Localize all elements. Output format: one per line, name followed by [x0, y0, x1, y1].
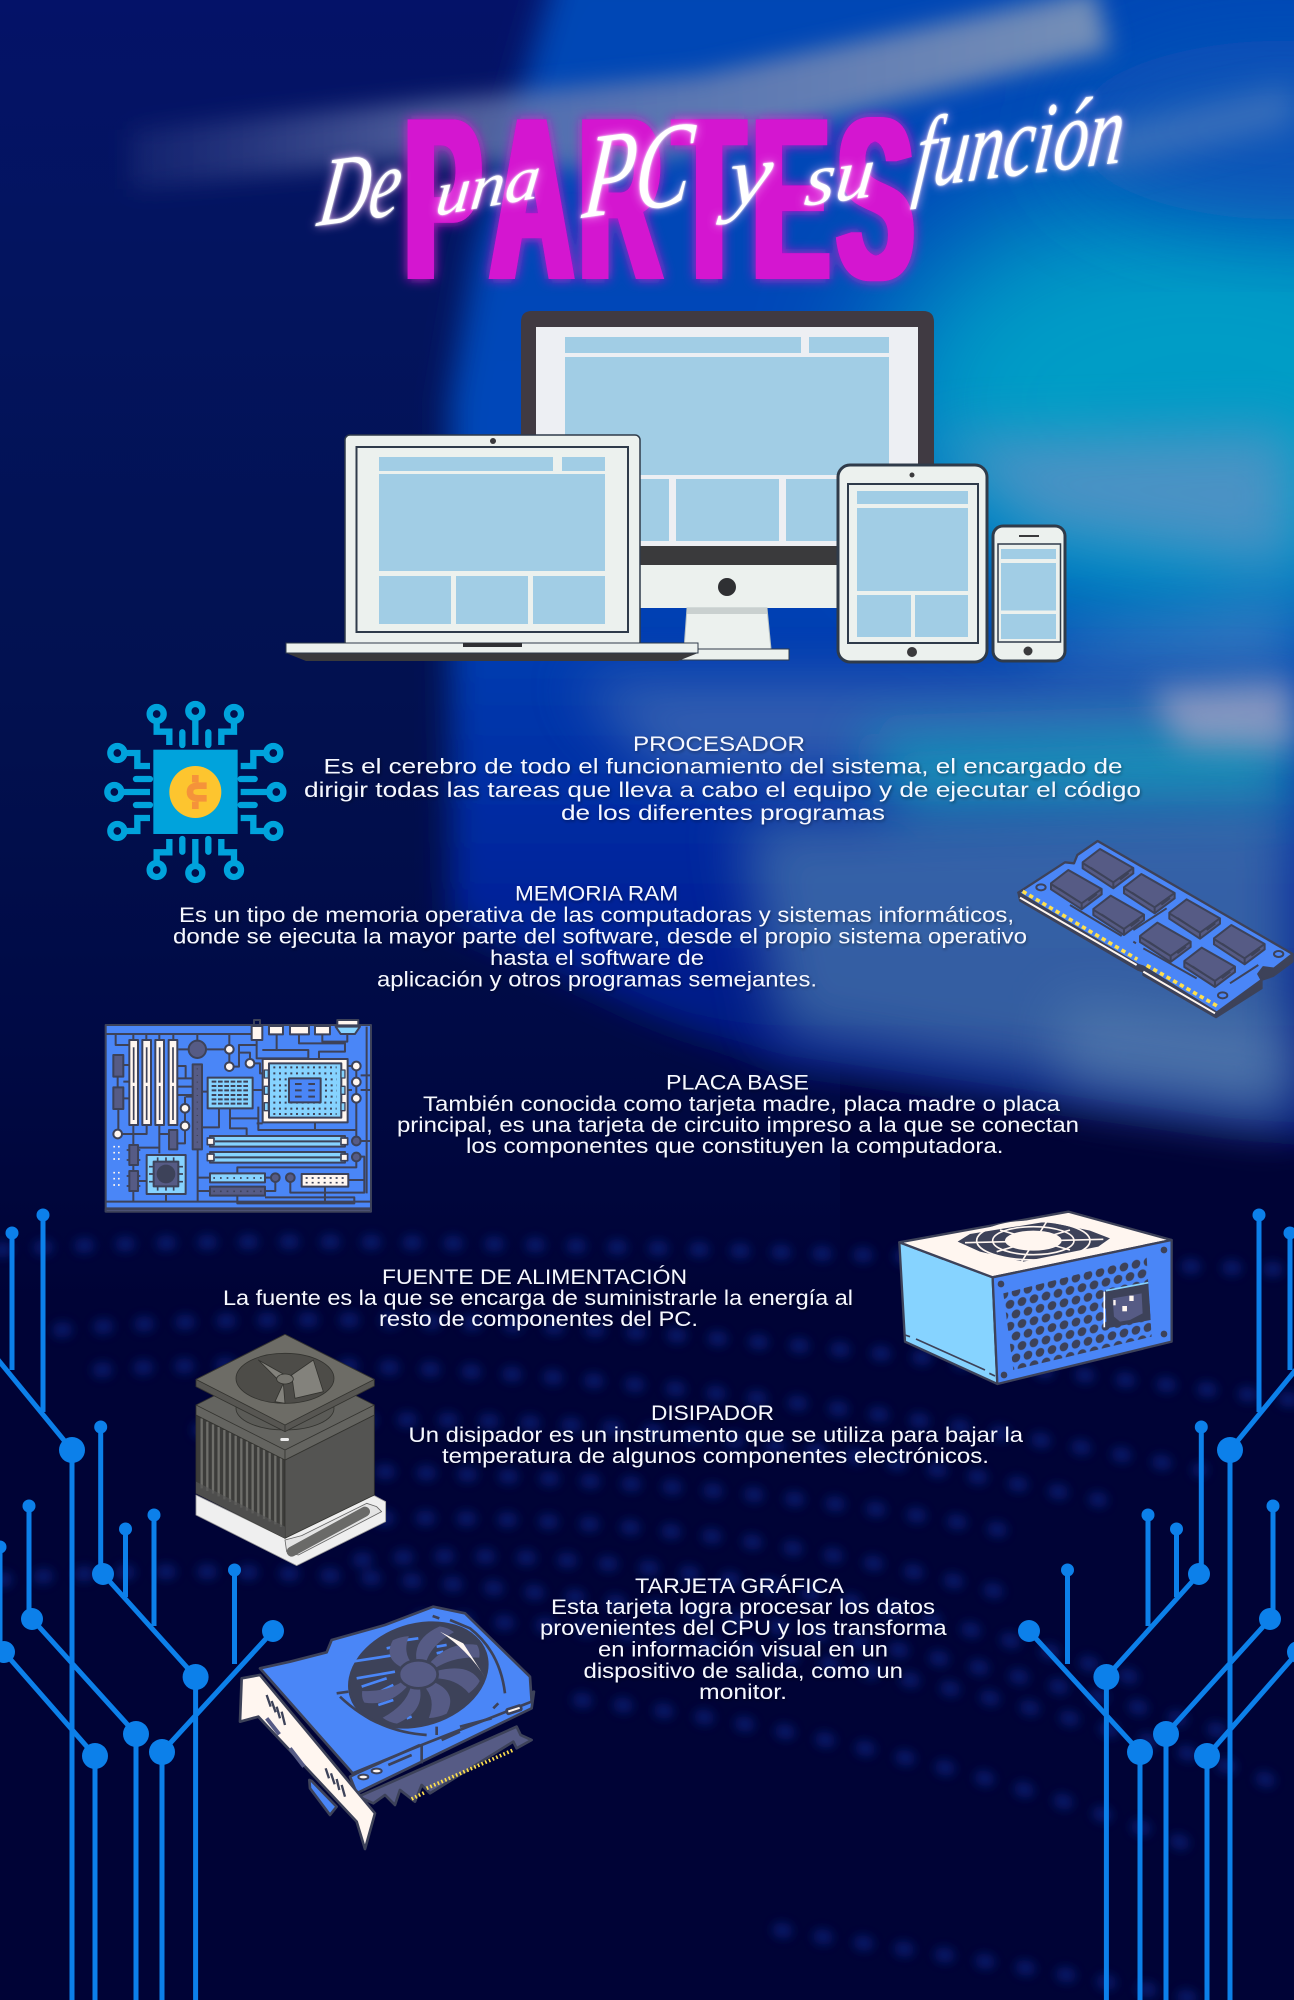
subtitle script: su [801, 131, 879, 223]
icon: RAM module [1018, 841, 1293, 1017]
text: memoria RAM: aplicación y otros programas semejantes. [377, 967, 817, 991]
text: tarjeta gráfica: dispositivo de salida, como un [584, 1659, 903, 1683]
text: procesador [304, 732, 1141, 825]
text: procesador: de los diferentes programas [561, 801, 885, 825]
circuit lines: right [1018, 1208, 1294, 2000]
icon: power supply [899, 1212, 1172, 1384]
devices illustration [286, 311, 1065, 662]
text: placa base [397, 1071, 1079, 1158]
icon: processor [107, 704, 283, 880]
text: disipador: temperatura de algunos componentes electrónicos. [442, 1444, 989, 1468]
circuit lines: left [0, 1208, 284, 2000]
subtitle script: y [715, 126, 778, 227]
icon: motherboard [106, 1020, 371, 1212]
monitor [521, 311, 934, 660]
text: disipador [408, 1401, 1023, 1468]
subtitle script: una [432, 141, 544, 231]
subtitle script [312, 73, 1131, 248]
text: disipador: Un disipador es un instrumento que se utiliza para bajar la [408, 1423, 1023, 1447]
text: placa base: También conocida como tarjeta madre, placa madre o placa [423, 1092, 1060, 1116]
text: memoria RAM: MEMORIA RAM [515, 882, 678, 906]
text: procesador: Es el cerebro de todo el funcionamiento del sistema, el encargado de [324, 755, 1122, 779]
text: memoria RAM [173, 882, 1027, 991]
text: memoria RAM: hasta el software de [490, 946, 704, 970]
text: tarjeta gráfica: provenientes del CPU y los transforma [540, 1616, 947, 1640]
icon: graphics card [240, 1606, 534, 1849]
text: tarjeta gráfica: TARJETA GRÁFICA [635, 1573, 845, 1598]
text: procesador: PROCESADOR [633, 732, 805, 756]
text: tarjeta gráfica [540, 1573, 947, 1704]
subtitle script: PC [577, 95, 700, 245]
text: disipador: DISIPADOR [651, 1401, 774, 1425]
text: placa base: principal, es una tarjeta de circuito impreso a la que se conectan [397, 1113, 1079, 1137]
text: fuente de alimentación [223, 1264, 853, 1331]
subtitle script: función [909, 73, 1131, 211]
text: placa base: PLACA BASE [666, 1071, 809, 1095]
text: tarjeta gráfica: monitor. [699, 1680, 787, 1704]
text: tarjeta gráfica: en información visual en un [598, 1638, 888, 1662]
text: memoria RAM: Es un tipo de memoria operativa de las computadoras y sistemas informáticos, [179, 903, 1014, 927]
subtitle script: De [312, 127, 410, 248]
text: memoria RAM: donde se ejecuta la mayor parte del software, desde el propio sistema operativo [173, 924, 1027, 948]
dotted blurred bands [0, 1242, 1294, 2000]
icon: heatsink [196, 1334, 386, 1566]
text: tarjeta gráfica: Esta tarjeta logra procesar los datos [551, 1595, 935, 1619]
text: fuente de alimentación: FUENTE DE ALIMENTACIÓN [382, 1264, 687, 1289]
tablet [838, 465, 987, 662]
text: procesador: dirigir todas las tareas que lleva a cabo el equipo y de ejecutar el código [304, 778, 1141, 802]
text: fuente de alimentación: resto de componentes del PC. [379, 1307, 698, 1331]
text: placa base: los componentes que constituyen la computadora. [466, 1134, 1004, 1158]
title: PARTES: PARTES [405, 69, 913, 329]
laptop [286, 435, 698, 661]
phone [993, 526, 1065, 661]
text: fuente de alimentación: La fuente es la que se encarga de suministrarle la energía al [223, 1286, 853, 1310]
